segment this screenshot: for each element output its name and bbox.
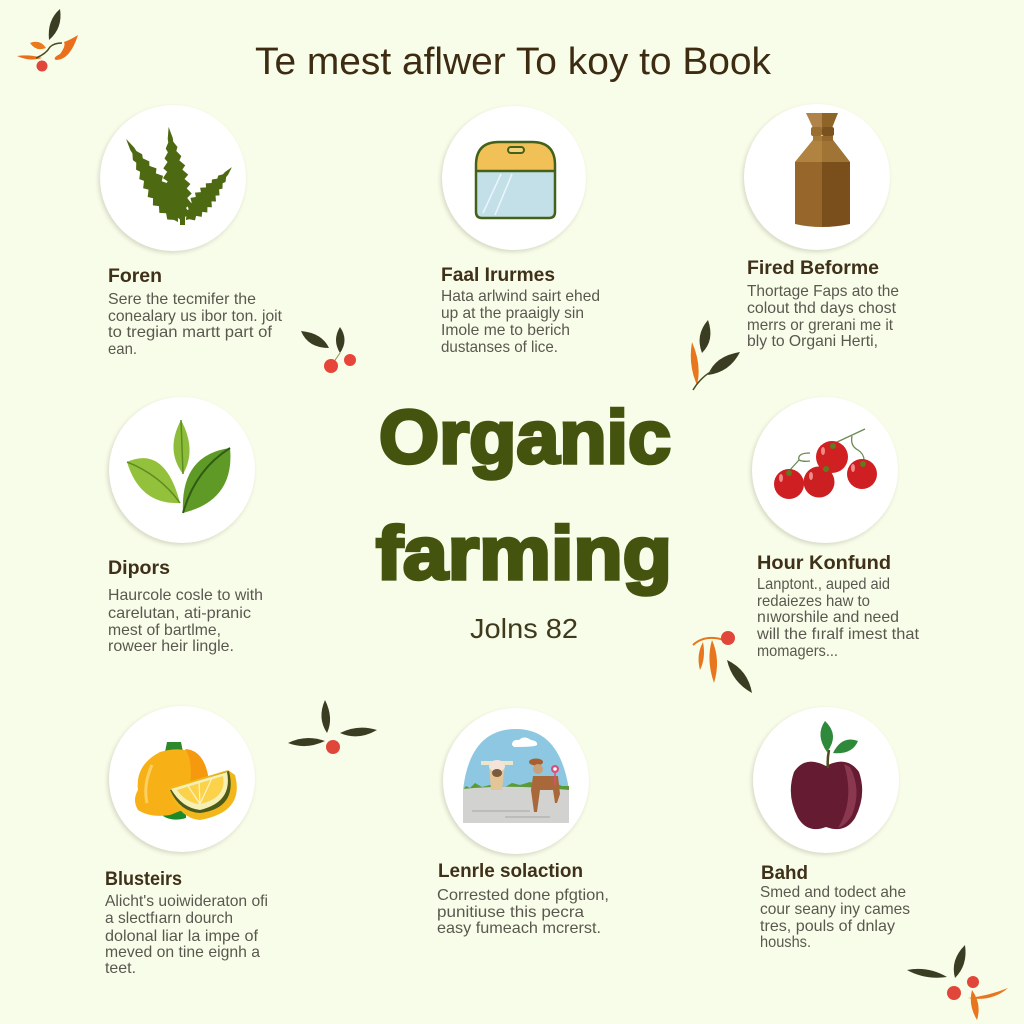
body text: houshs. [760, 934, 811, 951]
body text: to tregian martt part of [108, 324, 273, 341]
body text: Haurcole cosle to with [108, 587, 263, 604]
sprig: between lower panels [288, 700, 377, 754]
heading: Hour Konfund [757, 552, 891, 574]
body text: up at the praaigly sin [441, 305, 584, 322]
heading: Fired Beforme [747, 257, 879, 279]
body text [105, 893, 268, 977]
body text: Thortage Faps ato the [747, 283, 899, 300]
icon: red cherry tomatoes [750, 397, 898, 545]
panel: Hour Konfund [750, 397, 920, 660]
central heading: Organic [379, 395, 671, 479]
body text [108, 587, 263, 655]
body text [747, 283, 899, 350]
body text: merrs or grerani me it [747, 317, 894, 334]
body text: meved on tine eignh a [105, 944, 260, 961]
body text [437, 887, 609, 937]
panel: Blusteirs [105, 706, 268, 977]
heading: Dipors [108, 557, 170, 579]
body text: Corrested done pfgtion, [437, 887, 609, 904]
body text: bly to Organi Herti, [747, 333, 878, 350]
panel: Faal Irurmes [440, 106, 600, 356]
body text: carelutan, ati-pranic [108, 605, 251, 622]
icon: dark red apple [752, 707, 899, 855]
body text: dustanses of lice. [441, 339, 558, 356]
body text: cour seany iny cames [760, 901, 910, 918]
body text [756, 576, 920, 660]
sprig: top left corner [17, 9, 78, 72]
body text: nıworshile and need [757, 609, 899, 626]
icon: three green leaves [108, 397, 255, 545]
body text [108, 291, 283, 358]
icon: yellow fruit with slice [108, 706, 255, 854]
body text: Imole me to berich [441, 322, 570, 339]
body text: redaiezes haw to [757, 593, 870, 610]
central heading [376, 395, 672, 595]
panel: Foren [98, 105, 283, 358]
icon: brown bottle [742, 104, 890, 252]
body text: will the fıralf imest that [756, 626, 920, 643]
body text: roweer heir lingle. [108, 638, 234, 655]
body text: Hata arlwind sairt ehed [441, 288, 600, 305]
body text: dolonal liar la impe of [105, 928, 259, 945]
heading: Foren [108, 265, 162, 287]
panel: Dipors [108, 397, 263, 655]
body text [441, 288, 600, 356]
panel: Fired Beforme [742, 104, 899, 350]
sprig: bottom right corner [907, 945, 1008, 1020]
body text: easy fumeach mcrerst. [437, 920, 601, 937]
heading: Lenrle solaction [438, 860, 583, 882]
icon: lidded container [440, 106, 586, 252]
sprig: below fifth panel [693, 631, 752, 693]
body text: a slectfıarn dourch [105, 910, 233, 927]
body text: tres, pouls of dnlay [760, 918, 895, 935]
body text: teet. [105, 960, 136, 977]
title: Te mest aflwer To koy to Book [255, 41, 772, 83]
body text: conealary us ibor ton. joit [108, 308, 283, 325]
icon: serrated green leaf [98, 105, 246, 253]
body text: punitiuse this pecra [437, 904, 584, 921]
body text: momagers... [757, 643, 838, 660]
body text: Smed and todect ahe [760, 884, 906, 901]
sprig: below first panel [301, 327, 356, 373]
panel: Bahd [752, 707, 910, 951]
heading: Faal Irurmes [441, 264, 555, 286]
body text: Lanptont., auped aid [757, 576, 890, 593]
central subtitle: Jolns 82 [470, 613, 578, 644]
panel: Lenrle solaction [437, 708, 609, 937]
sprig: below second panel [691, 320, 740, 390]
body text: ean. [108, 341, 137, 358]
body text: mest of bartlme, [108, 622, 221, 639]
heading: Blusteirs [105, 868, 182, 890]
body text: Alicht's uoiwideraton ofi [105, 893, 268, 910]
body text: Sere the tecmifer the [108, 291, 256, 308]
body text: colout thd days chost [747, 300, 897, 317]
central heading: farming [376, 511, 672, 595]
icon: farm animals scene [442, 708, 589, 856]
body text [760, 884, 910, 951]
heading: Bahd [761, 862, 808, 884]
